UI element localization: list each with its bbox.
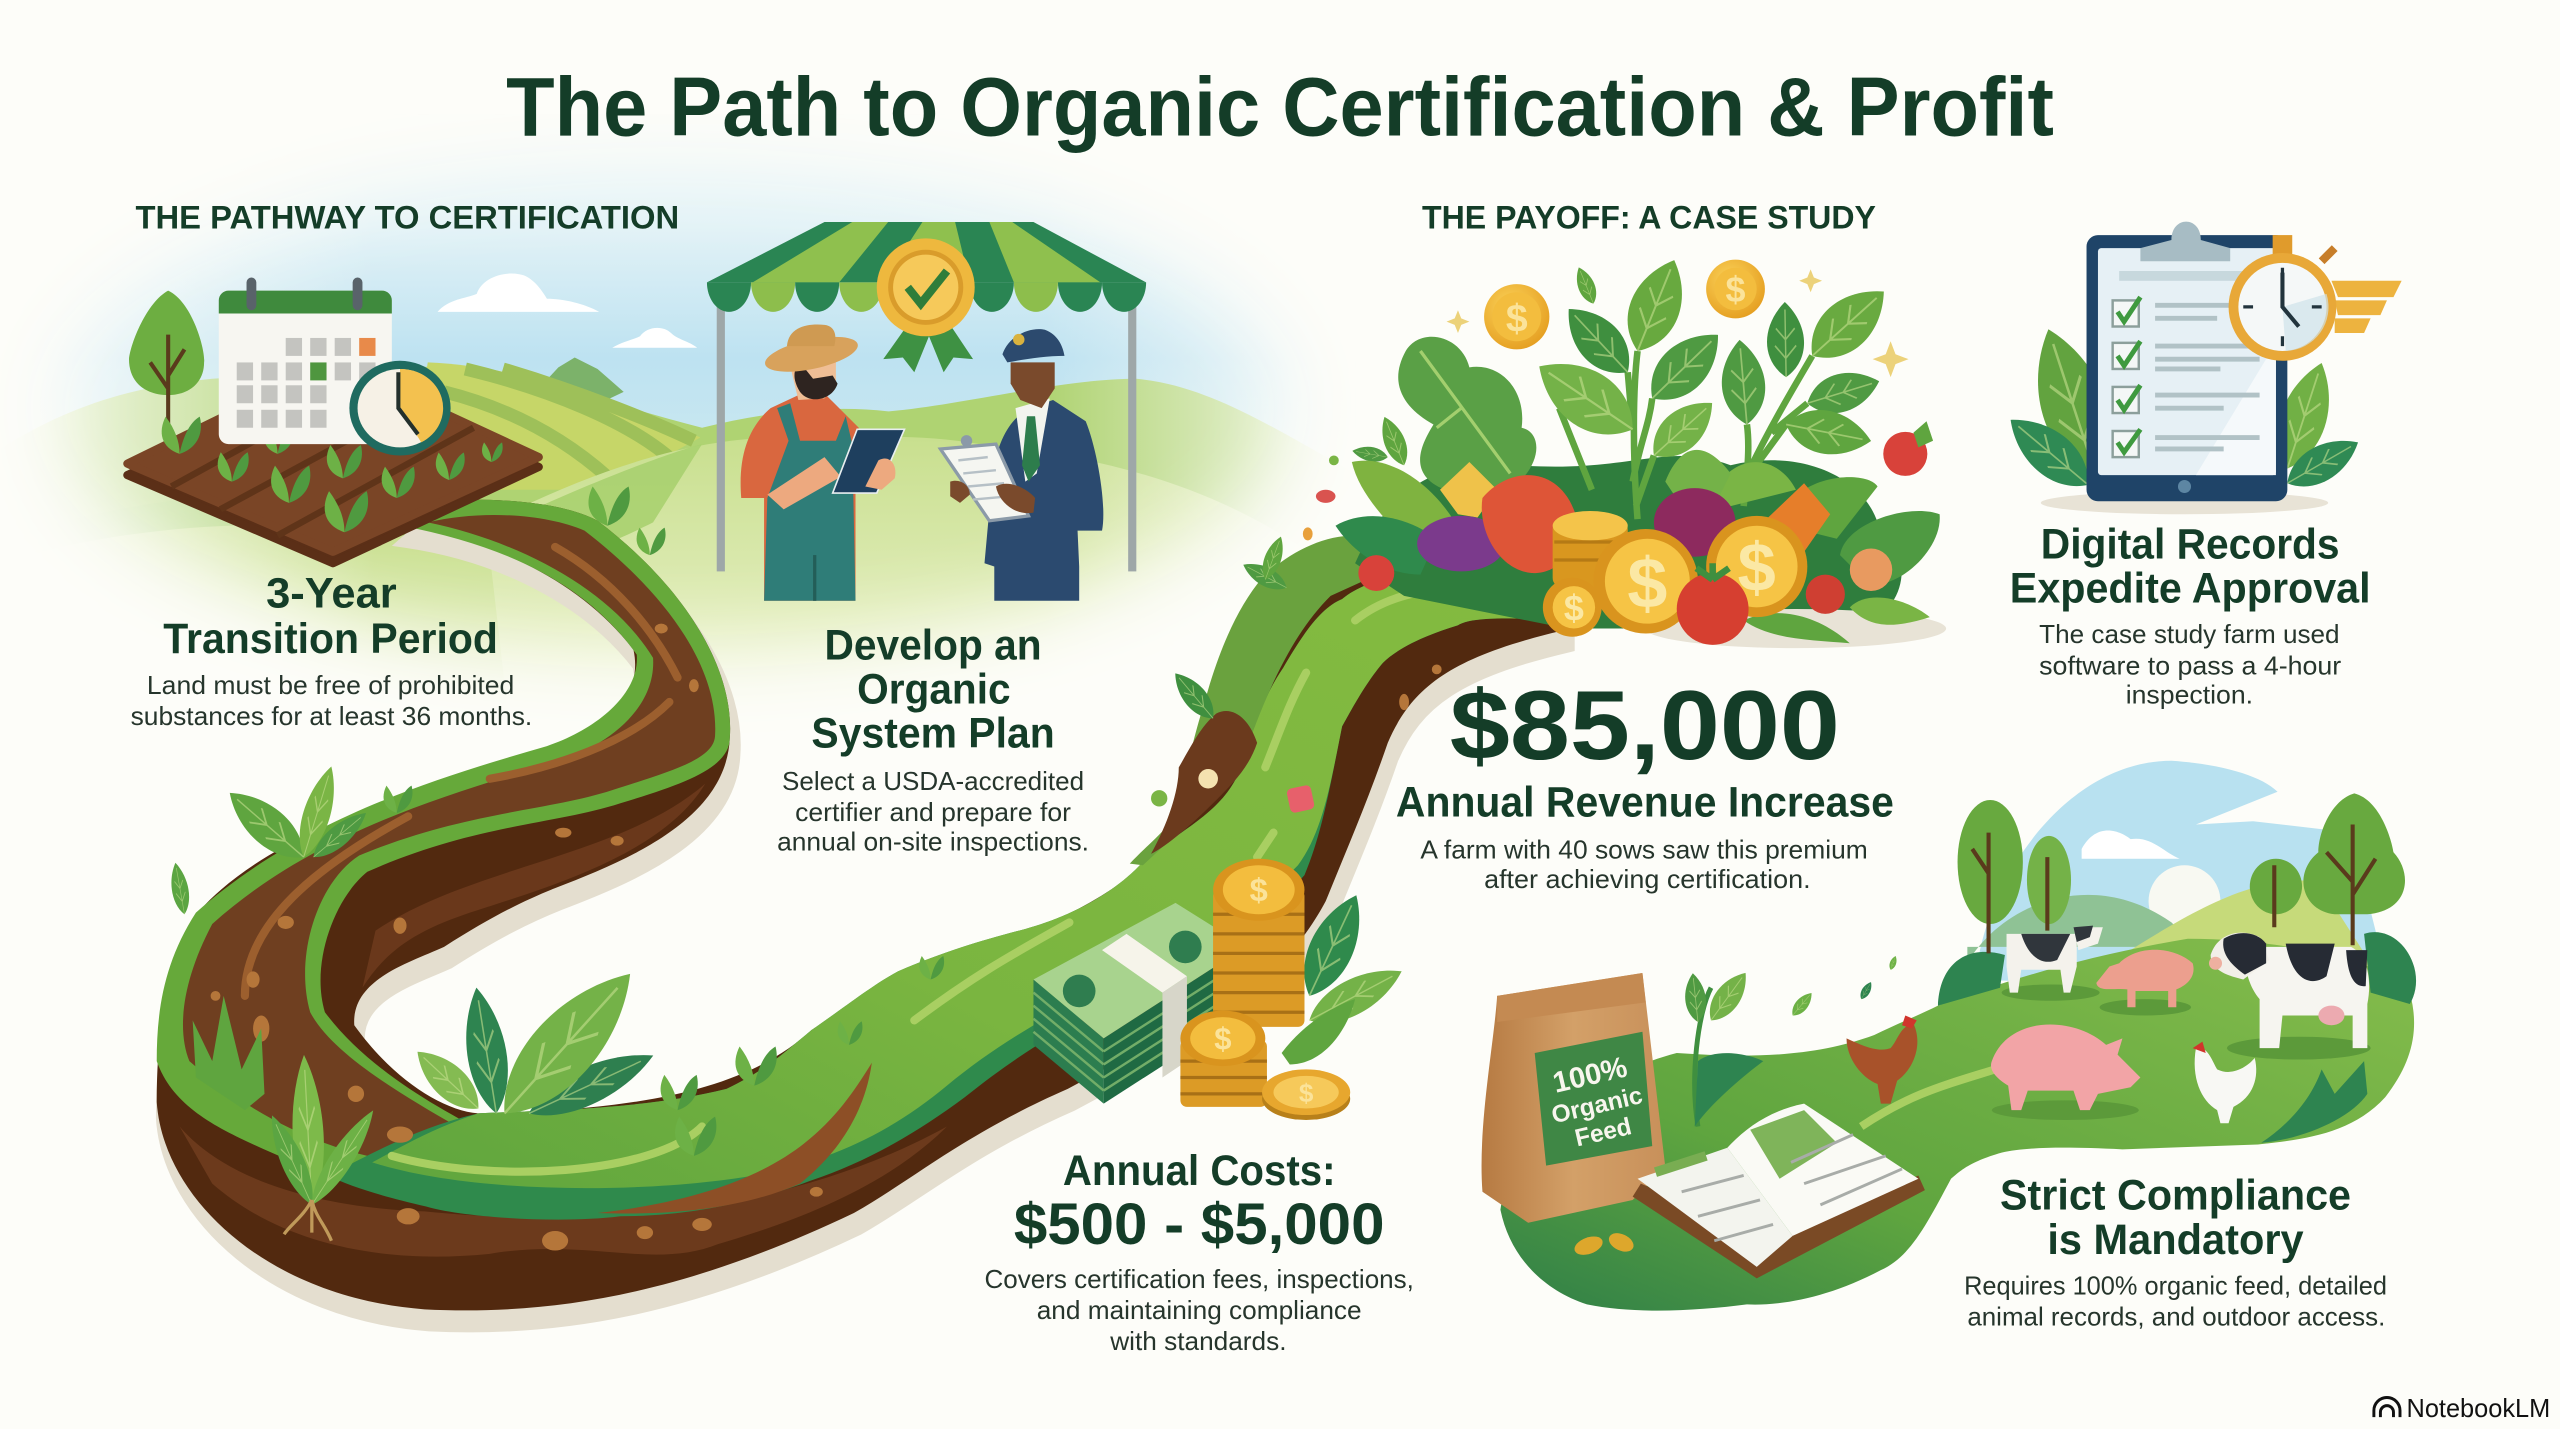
text block: organic system plan xyxy=(777,622,1089,857)
icon: clock xyxy=(349,361,451,455)
icon: floating gold coins xyxy=(1447,260,1909,377)
icon: small pig xyxy=(2096,950,2194,1015)
icon: stack of cash xyxy=(1033,903,1246,1104)
title: The Path to Organic Certification & Profit xyxy=(506,61,2054,154)
icon: small cow xyxy=(2002,926,2103,1001)
text block: annual costs: with standards. xyxy=(1109,1326,1287,1356)
icon: gold coin stacks xyxy=(1180,859,1350,1120)
text block: strict compliance xyxy=(1964,1172,2387,1332)
text block: 3-year transition: substances for at least 36 months. xyxy=(131,701,532,731)
icon: gold coin stacks: $ xyxy=(1250,871,1268,908)
icon: tree beside calendar xyxy=(129,291,204,444)
text block: digital records: inspection. xyxy=(2126,680,2253,710)
icon: leaves beside cash xyxy=(1282,886,1410,1064)
text block: 3-year transition: 3-Year xyxy=(266,569,397,616)
icon: open record book xyxy=(1572,1104,1925,1278)
text block: 3-year transition: Land must be free of prohibited xyxy=(147,670,514,700)
icon: mossy back of hump with soil lump xyxy=(1130,455,1420,865)
text block: strict compliance: is Mandatory xyxy=(2047,1216,2304,1263)
icon: large gold coins: $ xyxy=(1738,529,1776,606)
icon: background plants and leaves of the harvest xyxy=(1336,251,1940,629)
icon: cloud small xyxy=(612,328,697,348)
icon: gold coin stacks: $ xyxy=(1299,1078,1314,1108)
icon: farmer with tablet xyxy=(741,325,904,601)
icon: large gold coins: $ xyxy=(1564,587,1584,628)
text block: strict compliance: Requires 100% organic feed, detailed xyxy=(1964,1271,2387,1301)
text block: organic system plan: Develop an xyxy=(824,622,1042,669)
icon: brown hen xyxy=(1847,1015,1917,1104)
panel: pasture landscape xyxy=(1500,761,2416,1311)
text block: revenue increase: after achieving certification. xyxy=(1484,864,1811,894)
text block: revenue increase: $85,000 xyxy=(1450,670,1840,780)
icon: grass tufts and sprouts along the path xyxy=(167,487,944,1241)
icon: market tent with certification seal xyxy=(707,222,1146,571)
text block: digital records: The case study farm used xyxy=(2039,619,2340,649)
text block: digital records xyxy=(2010,520,2371,710)
icon: calendar xyxy=(219,278,392,444)
text block: strict compliance: animal records, and outdoor access. xyxy=(1967,1302,2385,1332)
text block: annual costs: $500 - $5,000 xyxy=(1014,1192,1384,1257)
icon: organic feed bag: Organic xyxy=(1549,1082,1645,1129)
icon: vegetable harvest with gold coins xyxy=(1358,421,1946,648)
text block: annual costs xyxy=(984,1147,1414,1356)
icon: floating gold coins: $ xyxy=(1726,269,1746,310)
text block: strict compliance: Strict Compliance xyxy=(2000,1172,2351,1219)
heading: pathway: THE PATHWAY TO CERTIFICATION xyxy=(136,199,679,236)
text block: 3-year transition xyxy=(131,569,532,731)
text block: organic system plan: annual on-site inspections. xyxy=(777,827,1089,857)
icon: organic feed bag xyxy=(1482,973,1665,1223)
icon: large gold coins xyxy=(1543,516,1807,645)
text block: annual costs: and maintaining compliance xyxy=(1037,1295,1362,1325)
icon: winged stopwatch xyxy=(2229,235,2402,361)
text block: digital records: Expedite Approval xyxy=(2010,564,2371,611)
text block: annual costs: Covers certification fees, inspections, xyxy=(984,1264,1414,1294)
text block: revenue increase xyxy=(1396,670,1894,894)
panel: landscape backdrop xyxy=(39,159,1310,688)
text block: digital records: software to pass a 4-hour xyxy=(2039,650,2342,680)
icon: inspector with clipboard xyxy=(940,329,1103,601)
icon: large pig xyxy=(1991,1025,2140,1120)
icon: clipboard with checklist xyxy=(1997,222,2367,514)
text block: organic system plan: System Plan xyxy=(811,710,1055,757)
logo: NotebookLM: NotebookLM xyxy=(2407,1393,2550,1423)
icon: large gold coins: $ xyxy=(1627,543,1667,623)
icon: gold coin stacks: $ xyxy=(1214,1022,1231,1057)
text block: organic system plan: certifier and prepare for xyxy=(795,797,1071,827)
text block: annual costs: Annual Costs: xyxy=(1063,1147,1336,1194)
icon: soil plot with seedlings xyxy=(127,362,539,563)
text block: revenue increase: Annual Revenue Increase xyxy=(1396,778,1894,825)
text block: digital records: Digital Records xyxy=(2041,520,2340,567)
icon: trees in pasture xyxy=(1958,793,2405,953)
text block: organic system plan: Organic xyxy=(857,666,1011,713)
text block: organic system plan: Select a USDA-accredited xyxy=(782,766,1084,796)
icon: cloud large xyxy=(438,274,599,312)
icon: organic feed bag: Feed xyxy=(1572,1113,1634,1152)
icon: floating gold coins: $ xyxy=(1506,297,1528,340)
icon: large cow xyxy=(2209,933,2371,1060)
heading: payoff: THE PAYOFF: A CASE STUDY xyxy=(1422,199,1876,236)
icon: white hen xyxy=(2193,1042,2256,1123)
text block: 3-year transition: Transition Period xyxy=(163,615,498,662)
text block: revenue increase: A farm with 40 sows saw this premium xyxy=(1420,835,1868,865)
icon: organic feed bag: 100% xyxy=(1550,1051,1630,1100)
icon: plant beside feed bag xyxy=(1683,955,1899,1126)
road: winding path xyxy=(157,500,1569,1327)
